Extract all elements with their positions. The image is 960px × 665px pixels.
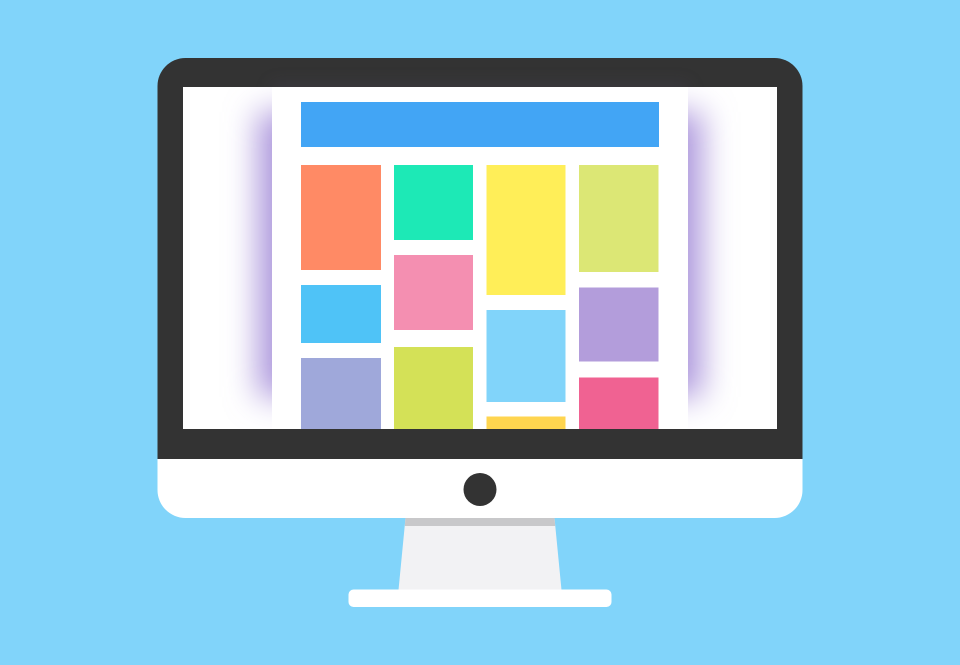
stand neck shadow <box>405 518 555 526</box>
tile column 1 <box>301 165 381 429</box>
bezel shadow tint <box>272 84 688 104</box>
page shadow <box>258 112 702 397</box>
stand base <box>348 590 612 607</box>
web page <box>272 87 688 429</box>
page header bar <box>301 102 659 147</box>
screen <box>183 87 777 429</box>
monitor chin <box>158 459 802 518</box>
stand neck <box>398 518 562 590</box>
tile column 4 <box>579 165 658 429</box>
monitor bezel <box>158 58 802 459</box>
illustration: desktop monitor <box>158 58 802 607</box>
monitor stand <box>348 518 612 607</box>
tile column 2 <box>394 165 473 429</box>
tile column 3 <box>486 165 566 429</box>
power button <box>464 473 496 506</box>
